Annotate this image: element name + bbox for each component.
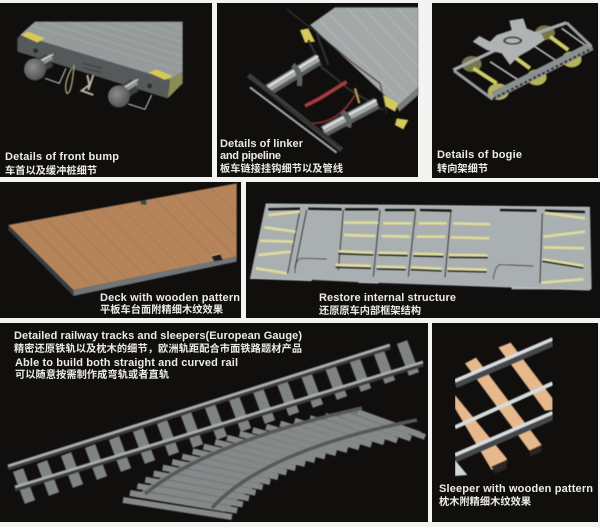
caption: linker and pipeline: and pipeline [220, 150, 281, 162]
panel: linker and pipeline [217, 3, 420, 177]
caption: tracks [14, 330, 302, 381]
caption: tracks: Able to build both straight and curved rail [15, 357, 238, 369]
illustration: coupler, buffers and pipes [247, 7, 420, 153]
panel: tracks [0, 323, 428, 522]
caption: tracks: 可以随意按需制作成弯轨或者直轨 [15, 368, 169, 381]
panel: internal structure [246, 182, 600, 318]
panel: wooden sleeper [432, 323, 598, 522]
caption: front bump [5, 151, 119, 177]
caption: internal structure: Restore internal structure [319, 292, 456, 304]
caption: front bump: 车首以及缓冲桩细节 [5, 164, 97, 177]
caption: wooden sleeper: 枕木附精细木纹效果 [439, 495, 531, 508]
panel: bogie [432, 3, 598, 178]
caption: bogie [437, 149, 522, 175]
illustration: bogie [453, 18, 592, 100]
caption: wooden sleeper [439, 483, 593, 508]
caption: tracks: Detailed railway tracks and sleepers(European Gauge) [14, 330, 302, 342]
panel: front bump [0, 3, 212, 177]
illustration: sleepers and rails [455, 339, 553, 476]
caption: wooden sleeper: Sleeper with wooden pattern [439, 483, 593, 495]
caption: front bump: Details of front bump [5, 151, 119, 163]
caption: wooden deck: 平板车台面附精细木纹效果 [100, 303, 223, 316]
illustration: underframe [250, 204, 592, 290]
caption: internal structure [319, 292, 456, 317]
illustration: deck with planks [8, 182, 238, 296]
caption: wooden deck: Deck with wooden pattern [100, 292, 240, 304]
caption: wooden deck [100, 292, 240, 316]
caption: linker and pipeline [220, 138, 343, 175]
illustration: straight rail [8, 342, 423, 502]
caption: linker and pipeline: 板车链接挂钩细节以及管线 [220, 162, 343, 175]
panel: wooden deck [0, 182, 241, 318]
caption: tracks: 精密还原铁轨以及枕木的细节，欧洲轨距配合市面铁路题材产品 [14, 342, 302, 355]
black frame slots [268, 209, 585, 289]
caption: bogie: Details of bogie [437, 149, 522, 161]
illustration: wagon front with buffers [17, 22, 187, 109]
caption: linker and pipeline: Details of linker [220, 138, 304, 150]
caption: internal structure: 还原原车内部框架结构 [319, 304, 421, 317]
caption: bogie: 转向架细节 [437, 162, 488, 175]
illustration: curved rail [123, 408, 425, 517]
yellow cross members [256, 212, 585, 283]
